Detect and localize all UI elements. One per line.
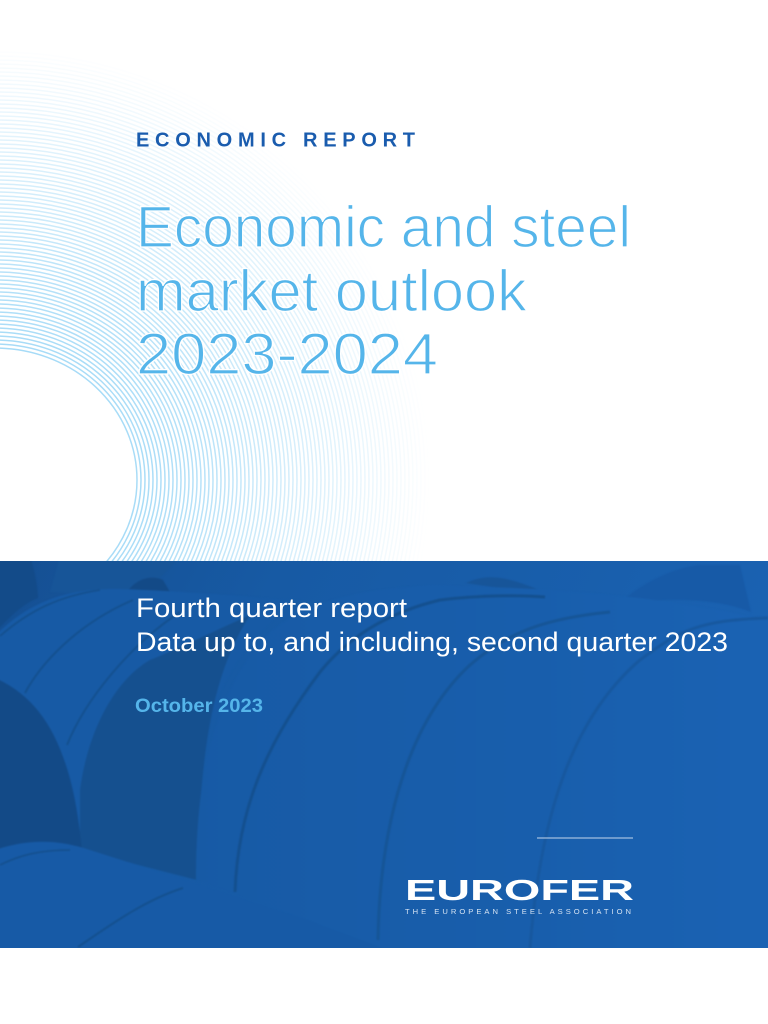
decorative concentric arc pattern — [0, 72, 404, 561]
title: 2023-2024 — [136, 322, 438, 387]
title: Economic and steel — [136, 195, 631, 260]
shadowed coil face — [80, 615, 250, 880]
title — [136, 195, 631, 387]
dark foreground dome — [0, 678, 82, 855]
large central coil — [196, 588, 542, 880]
title: market outlook — [136, 259, 528, 324]
subtitle — [136, 593, 728, 657]
logo rule — [537, 838, 633, 839]
subtitle: Fourth quarter report — [136, 593, 408, 623]
EUROFER logo — [405, 875, 634, 916]
lower foreground coil — [0, 842, 122, 942]
subtitle: Data up to, and including, second quarter 2023 — [136, 627, 728, 657]
left mid coil — [0, 589, 172, 778]
panel: blue photo band with steel coils — [0, 556, 768, 955]
rear coils — [0, 561, 750, 626]
EUROFER logo: EUROFER — [405, 875, 634, 907]
report label: ECONOMIC REPORT — [136, 130, 415, 152]
EUROFER logo: THE EUROPEAN STEEL ASSOCIATION — [405, 907, 631, 916]
date: October 2023 — [135, 696, 263, 717]
